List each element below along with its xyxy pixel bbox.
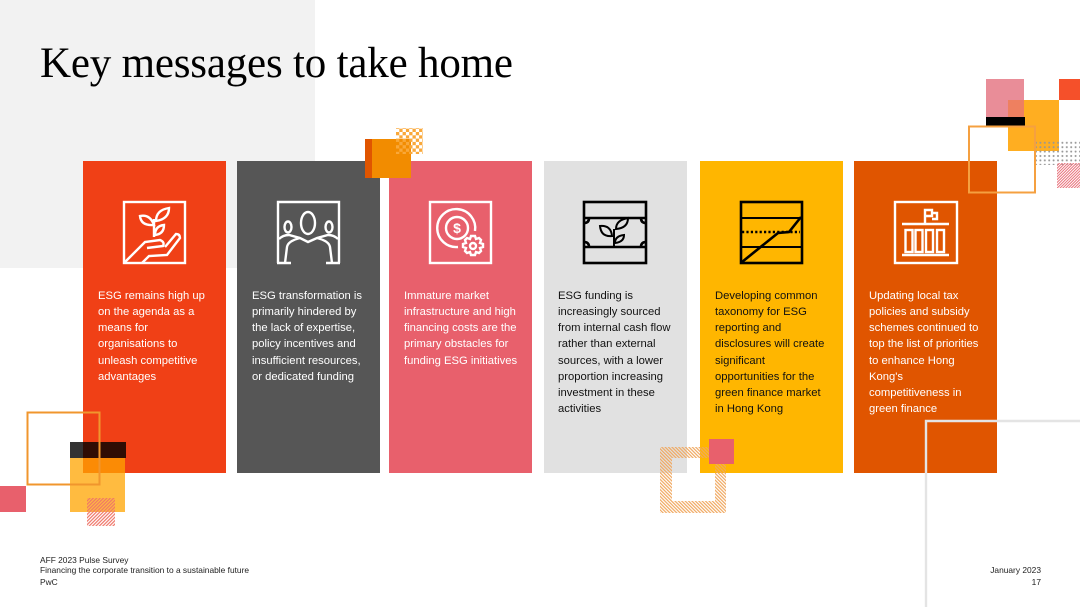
panel: card 3 immature market: [389, 161, 532, 473]
icon: government building: [895, 202, 957, 263]
icon: hand with plant: [124, 202, 185, 263]
footer left: [40, 555, 249, 587]
text: card 5 message: green finance market: [715, 387, 822, 399]
text: card 2 message: or dedicated funding: [252, 371, 354, 383]
text: card 1 message: on the agenda as a: [98, 306, 195, 318]
icon: coin and gear: $: [453, 220, 461, 236]
text: card 1 message: organisations to: [98, 338, 177, 350]
text: card 1 message: ESG remains high up: [98, 290, 205, 302]
text: card 3 message: Immature market: [404, 290, 490, 302]
panel: card 1 ESG high on agenda: [83, 161, 226, 473]
icon: chart box with dotted line: [741, 202, 802, 263]
footer right: January 2023: [990, 565, 1041, 575]
text: card 4 message: investment in these: [558, 387, 655, 399]
text: card 6 message: Kong's: [869, 371, 903, 383]
text: card 6 message: to enhance Hong: [869, 355, 955, 367]
text: card 1 message: advantages: [98, 371, 157, 383]
text: card 6 message: [869, 290, 979, 415]
text: card 4 message: ESG funding is: [558, 290, 633, 302]
text: card 5 message: taxonomy for ESG: [715, 306, 807, 318]
panel: card 5 common taxonomy: [700, 161, 843, 473]
panel: card 6 local tax policies: [854, 161, 997, 473]
text: card 6 message: policies and subsidy: [869, 306, 970, 318]
text: card 5 message: significant: [715, 355, 766, 367]
text: card 6 message: top the list of priorities: [869, 338, 979, 350]
text: card 4 message: proportion increasing: [558, 371, 663, 383]
text: card 3 message: financing costs are the: [404, 322, 517, 334]
text: card 6 message: competitiveness in: [869, 387, 962, 399]
text: card 2 message: policy incentives and: [252, 338, 356, 350]
text: card 3 message: primary obstacles for: [404, 338, 509, 350]
grey background block: [0, 0, 315, 268]
title: Key messages to take home: [40, 40, 513, 87]
decoration: bottom right corner lines: [926, 421, 1080, 607]
text: card 1 message: unleash competitive: [98, 355, 197, 367]
text: card 5 message: disclosures will create: [715, 338, 824, 350]
text: card 5 message: Developing common: [715, 290, 818, 302]
text: card 1 message: means for: [98, 322, 148, 334]
text: card 3 message: funding ESG initiatives: [404, 355, 518, 367]
text: card 3 message: infrastructure and high: [404, 306, 516, 318]
text: card 5 message: opportunities for the: [715, 371, 814, 383]
icon: banknote with plant: [584, 202, 646, 263]
text: card 6 message: green finance: [869, 403, 937, 415]
footer left: Financing the corporate transition to a sustainable future: [40, 565, 249, 575]
text: card 6 message: Updating local tax: [869, 290, 959, 302]
text: card 6 message: schemes continued to: [869, 322, 978, 334]
text: card 4 message: sources, with a lower: [558, 355, 663, 367]
text: card 3 message: [404, 290, 518, 367]
text: card 2 message: primarily hindered by: [252, 306, 357, 318]
text: card 4 message: rather than external: [558, 338, 656, 350]
decoration: top right squares: [969, 79, 1080, 192]
text: card 4 message: increasingly sourced: [558, 306, 661, 318]
footer right: [990, 565, 1041, 587]
text: card 2 message: insufficient resources,: [252, 355, 361, 367]
text: card 4 message: [558, 290, 671, 415]
text: card 2 message: ESG transformation is: [252, 290, 362, 302]
decoration: bottom left squares: [0, 412, 126, 526]
icon: group of people: [277, 202, 340, 263]
text: card 1 message: [98, 290, 205, 383]
text: card 4 message: activities: [558, 403, 602, 415]
text: card 2 message: [252, 290, 362, 383]
text: card 5 message: in Hong Kong: [715, 403, 783, 415]
text: card 5 message: reporting and: [715, 322, 781, 334]
decoration: top centre orange squares: [365, 128, 423, 178]
text: card 4 message: from internal cash flow: [558, 322, 671, 334]
icon: coin and gear: [430, 202, 491, 263]
footer left: AFF 2023 Pulse Survey: [40, 555, 129, 565]
footer left: PwC: [40, 577, 58, 587]
panel: card 4 ESG funding: [544, 161, 687, 473]
footer right: 17: [1032, 577, 1041, 587]
panel: card 2 ESG transformation: [237, 161, 380, 473]
decoration: bottom centre hatched square: [660, 439, 734, 513]
text: card 2 message: the lack of expertise,: [252, 322, 355, 334]
text: card 5 message: [715, 290, 824, 415]
